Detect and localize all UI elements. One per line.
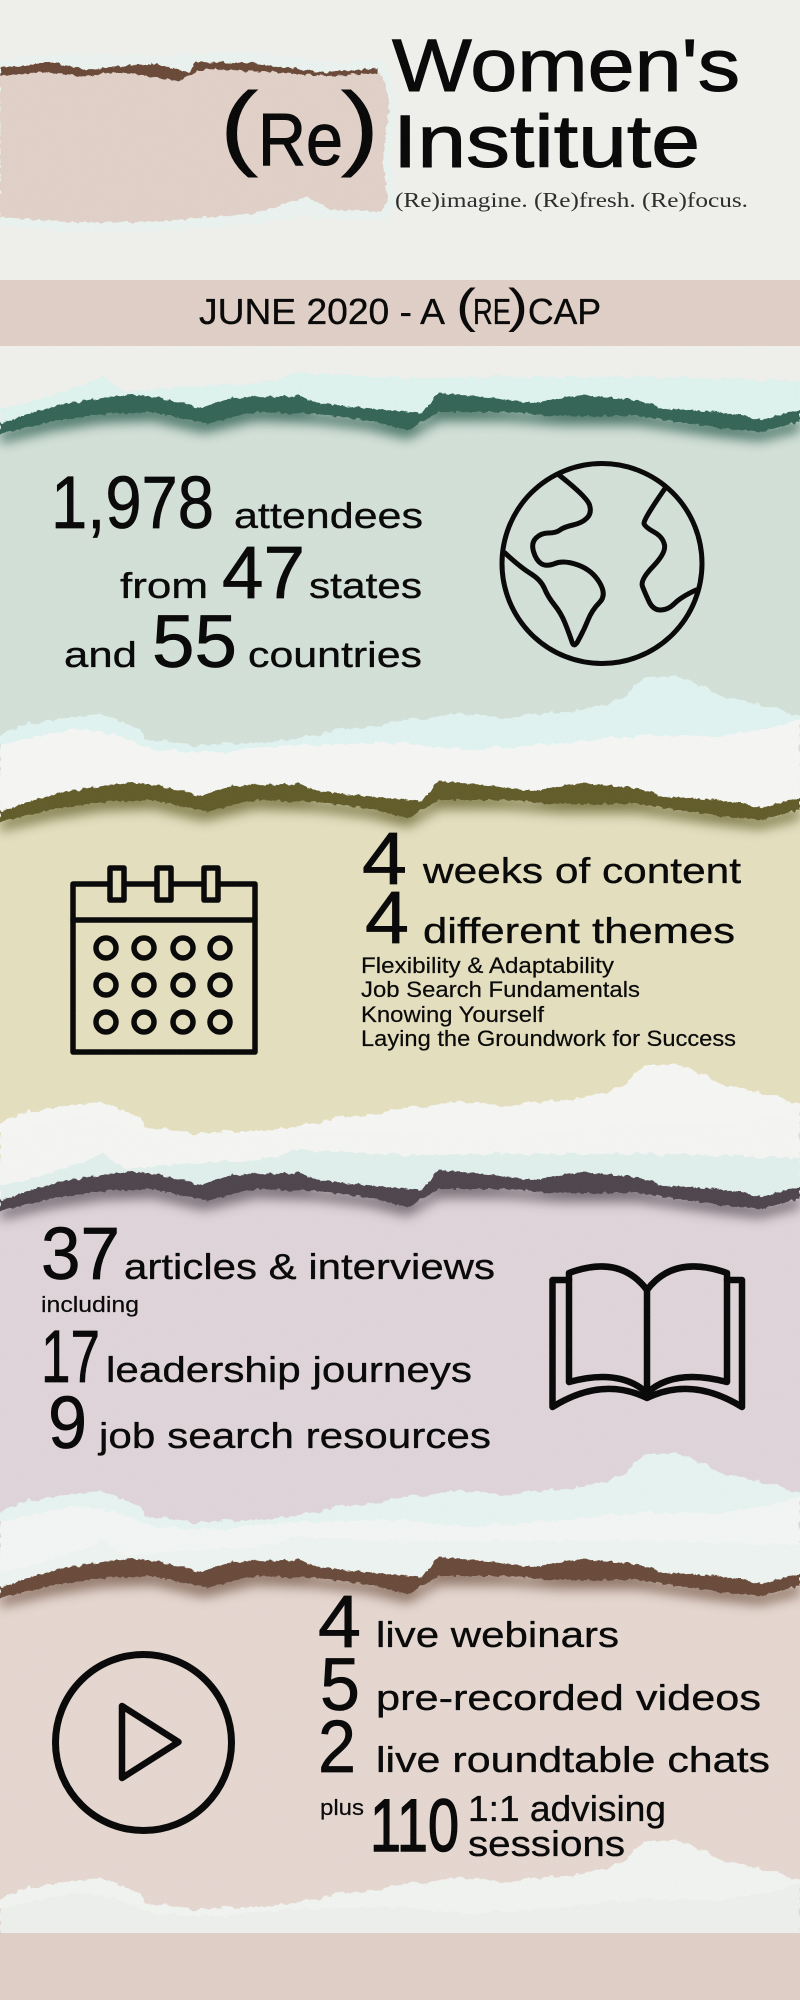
- torn paper rim: [0, 52, 398, 232]
- stat: plus 110 advising sessions: [320, 1784, 666, 1867]
- stat: 9 job search resources: [48, 1381, 491, 1464]
- stat: plus 110 advising sessions: 110: [370, 1784, 459, 1867]
- torn brown edge: [0, 62, 378, 81]
- stat: 1,978 attendees: 1,978: [51, 461, 214, 544]
- icon: calendar: [73, 868, 255, 1052]
- icon: globe: [502, 464, 702, 664]
- logo word: (Re): ): [340, 73, 380, 179]
- stat: 1,978 attendees: [51, 461, 423, 544]
- stat: 17 leadership journeys: leadership journeys: [106, 1349, 472, 1390]
- panel: webinars and videos: [0, 1537, 800, 1974]
- stat: 9 job search resources: 9: [48, 1381, 87, 1464]
- stat: 5 pre-recorded videos: [320, 1643, 761, 1726]
- stat: 4 live webinars: [318, 1580, 619, 1663]
- pink torn paper background: [0, 1537, 800, 1974]
- torn paper window: [0, 62, 390, 222]
- stat: 5 pre-recorded videos: 5: [320, 1643, 360, 1726]
- stat: 2 live roundtable chats: [318, 1705, 770, 1788]
- olive torn paper background: [0, 761, 800, 1198]
- panel: weeks and themes: [0, 761, 800, 1198]
- icon: open book: [552, 1266, 742, 1407]
- panel: articles and interviews: [0, 1150, 800, 1587]
- list of themes: Job Search Fundamentals: [361, 977, 640, 1002]
- stat: 2 live roundtable chats: 2: [318, 1705, 356, 1788]
- header: logo over torn paper: [0, 24, 748, 232]
- list of themes: Laying the Groundwork for Success: [361, 1026, 736, 1051]
- stat: from 47 states: states: [309, 565, 422, 606]
- list of themes: Knowing Yourself: [361, 1002, 545, 1027]
- logo word: (Re): Re: [258, 98, 343, 181]
- stat: 1,978 attendees: attendees: [234, 495, 423, 536]
- stat: 4 weeks of content: weeks of content: [422, 850, 741, 891]
- list of themes: Flexibility & Adaptability: [361, 953, 614, 978]
- stat: 4 different themes: different themes: [423, 910, 735, 951]
- mauve torn paper background: [0, 1150, 800, 1587]
- title band: CAP: [528, 291, 601, 332]
- stat: 4 live webinars: live webinars: [376, 1614, 619, 1655]
- stat: from 47 states: 47: [222, 531, 305, 614]
- stat: and 55 countries: and: [64, 634, 137, 675]
- stat: 4 live webinars: 4: [318, 1580, 361, 1663]
- title band: JUNE 2020 - A: [199, 291, 445, 332]
- stat: 9 job search resources: job search resources: [98, 1415, 491, 1456]
- stat: 17 leadership journeys: 17: [41, 1315, 100, 1398]
- title band: (: [456, 279, 476, 332]
- list of themes: [361, 953, 736, 1051]
- stat: plus 110 advising sessions: sessions: [468, 1823, 625, 1864]
- green torn paper background: [0, 373, 800, 810]
- stat: from 47 states: from: [120, 565, 208, 606]
- stat: plus 110 advising sessions: 1:1 advising: [468, 1788, 666, 1829]
- logo word: Women's: Women's: [392, 24, 740, 107]
- logo word: (Re): [219, 73, 380, 181]
- title band: RE: [473, 291, 511, 332]
- tagline: (Re)imagine. (Re)fresh. (Re)focus.: [395, 188, 748, 212]
- stat: from 47 states: [120, 531, 422, 614]
- stat: and 55 countries: [64, 600, 422, 683]
- stat: plus 110 advising sessions: plus: [320, 1795, 364, 1820]
- title band: ): [508, 279, 528, 332]
- stat: and 55 countries: 55: [152, 600, 237, 683]
- stat: and 55 countries: countries: [248, 634, 422, 675]
- stat: 17 leadership journeys: [41, 1315, 472, 1398]
- stat: 4 weeks of content: [362, 817, 741, 900]
- icon: play button: [56, 1654, 232, 1830]
- stat: 37 articles and interviews: 37: [41, 1212, 120, 1295]
- logo word: (Re): (: [219, 73, 259, 179]
- logo word: Institute: Institute: [393, 100, 700, 183]
- stat: 37 articles and interviews: [41, 1212, 495, 1295]
- stat: 4 weeks of content: 4: [362, 817, 407, 900]
- footer band: [0, 1933, 800, 2000]
- text: including: including: [41, 1292, 139, 1317]
- stat: 37 articles and interviews: articles & interviews: [124, 1246, 495, 1287]
- stat: 5 pre-recorded videos: pre-recorded videos: [376, 1677, 761, 1718]
- stat: 4 different themes: [365, 876, 735, 959]
- panel: attendees: [0, 373, 800, 810]
- stat: 2 live roundtable chats: live roundtable chats: [376, 1739, 770, 1780]
- stat: 4 different themes: 4: [365, 876, 409, 959]
- title band: [0, 279, 800, 346]
